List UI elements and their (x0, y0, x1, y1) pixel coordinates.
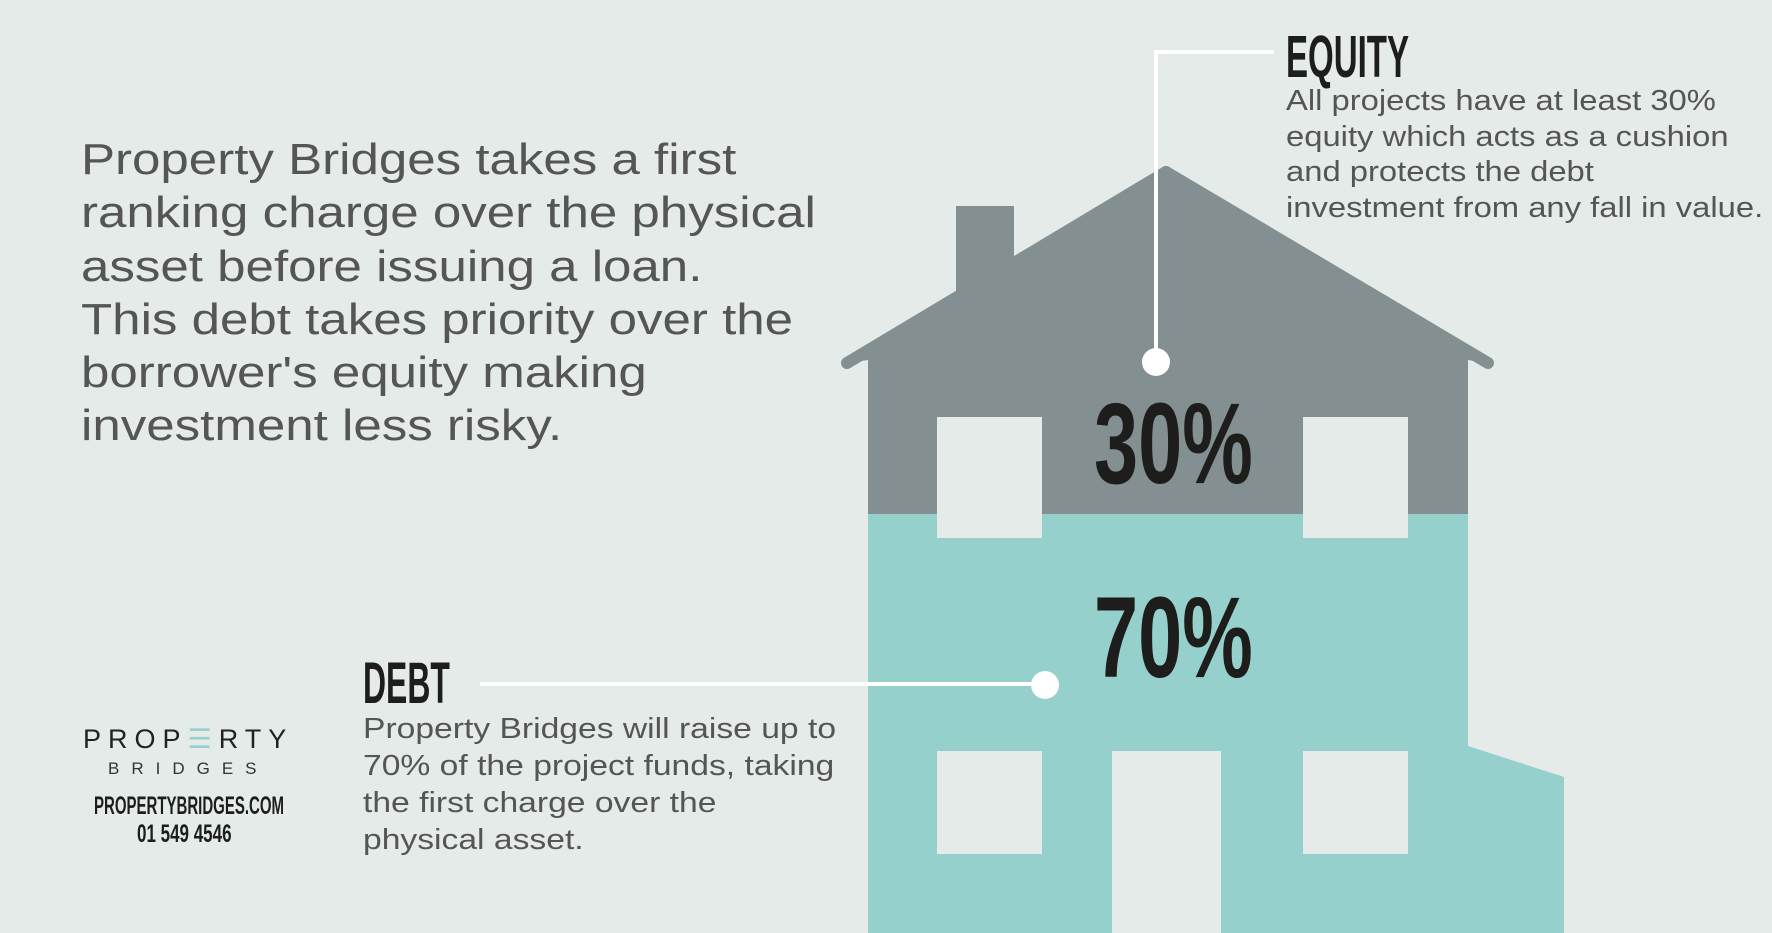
main paragraph: investment less risky. (81, 401, 562, 450)
equity text: and protects the debt (1286, 156, 1594, 188)
debt connector line (480, 671, 1059, 699)
main paragraph: This debt takes priority over the (81, 295, 793, 344)
website: PROPERTYBRIDGES.COM (94, 792, 284, 820)
equity text: investment from any fall in value. (1286, 192, 1763, 224)
main paragraph: asset before issuing a loan. (81, 242, 702, 291)
debt heading: DEBT (363, 651, 450, 716)
logo wordmark: PROP☰RTY (83, 724, 293, 754)
house top: equity (gray) (847, 172, 1488, 515)
equity text: equity which acts as a cushion (1286, 121, 1729, 153)
debt text: 70% of the project funds, taking (363, 750, 834, 782)
debt text: Property Bridges will raise up to (363, 713, 836, 745)
house bottom: debt (teal) (868, 514, 1564, 933)
main paragraph: ranking charge over the physical (81, 188, 816, 237)
debt text: the first charge over the (363, 787, 716, 819)
equity text (1286, 85, 1763, 224)
logo (83, 724, 293, 848)
debt text: physical asset. (363, 824, 584, 856)
70% label: 70% (1094, 574, 1253, 702)
main paragraph: Property Bridges takes a first (81, 135, 736, 184)
30% label: 30% (1094, 380, 1253, 508)
debt text (363, 713, 836, 856)
equity heading: EQUITY (1286, 24, 1409, 90)
main paragraph: borrower's equity making (81, 348, 647, 397)
phone: 01 549 4546 (137, 820, 232, 848)
main paragraph (81, 135, 816, 450)
windows (937, 417, 1408, 933)
equity connector line (1142, 52, 1274, 376)
equity text: All projects have at least 30% (1286, 85, 1716, 117)
logo subtitle: BRIDGES (108, 759, 269, 778)
